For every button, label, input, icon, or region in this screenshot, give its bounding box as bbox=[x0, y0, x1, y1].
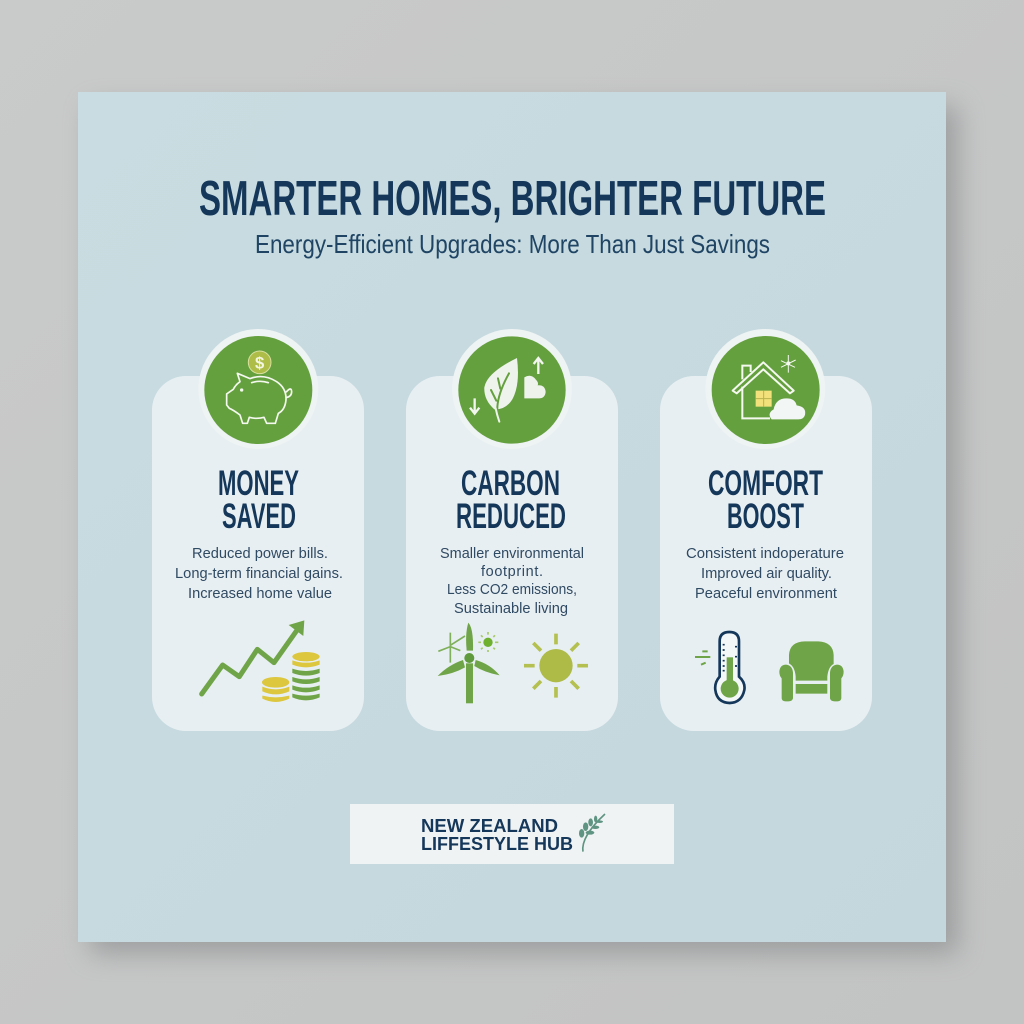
icon: thermometer bbox=[695, 632, 745, 703]
icon: fern leaf bbox=[579, 814, 605, 852]
logo: New Zealand Lifestyle Hub: NEW ZEALAND bbox=[421, 816, 558, 836]
logo: New Zealand Lifestyle Hub bbox=[350, 804, 674, 864]
heading: carbon reduced: REDUCED bbox=[456, 497, 566, 536]
heading: money saved: SAVED bbox=[222, 497, 296, 536]
panel: carbon reduced bbox=[406, 329, 618, 731]
panel: comfort boost bbox=[660, 329, 872, 731]
heading: money saved bbox=[218, 464, 299, 536]
panel: main background bbox=[78, 92, 946, 942]
subtitle: Energy-Efficient Upgrades: More Than Just Savings bbox=[255, 229, 770, 259]
icon: house badge bbox=[705, 329, 825, 449]
text: money benefits: Increased home value bbox=[188, 586, 332, 602]
heading: carbon reduced: CARBON bbox=[461, 464, 560, 503]
text: carbon benefits: footprint. bbox=[481, 564, 543, 580]
text: comfort benefits: Peaceful environment bbox=[695, 586, 837, 602]
text: carbon benefits bbox=[440, 546, 584, 617]
icon: wind turbines bbox=[438, 623, 500, 703]
icon: piggy bank badge: $ bbox=[255, 353, 265, 372]
icon: armchair bbox=[779, 641, 844, 701]
heading: comfort boost: COMFORT bbox=[708, 464, 823, 503]
heading: money saved: MONEY bbox=[218, 464, 299, 503]
text: money benefits: Long-term financial gains. bbox=[175, 566, 343, 582]
heading: carbon reduced bbox=[456, 464, 566, 536]
text: comfort benefits: Consistent indoperature bbox=[686, 546, 844, 562]
icon: growth chart with coins bbox=[202, 620, 320, 702]
text: comfort benefits bbox=[686, 546, 844, 602]
text: carbon benefits: Less CO2 emissions, bbox=[447, 582, 577, 598]
text: carbon benefits: Smaller environmental bbox=[440, 546, 584, 562]
logo: New Zealand Lifestyle Hub: LIFFESTYLE HUB bbox=[421, 834, 573, 854]
text: comfort benefits: Improved air quality. bbox=[701, 566, 832, 582]
panel: money saved bbox=[152, 329, 364, 731]
text: money benefits bbox=[175, 546, 343, 602]
heading: comfort boost: BOOST bbox=[727, 497, 804, 536]
heading: comfort boost bbox=[708, 464, 823, 536]
icon: piggy bank badge bbox=[198, 329, 318, 449]
text: money benefits: Reduced power bills. bbox=[192, 546, 328, 562]
icon: sun bbox=[524, 634, 588, 698]
icon: leaf and cloud badge bbox=[452, 329, 572, 449]
text: carbon benefits: Sustainable living bbox=[454, 601, 568, 617]
